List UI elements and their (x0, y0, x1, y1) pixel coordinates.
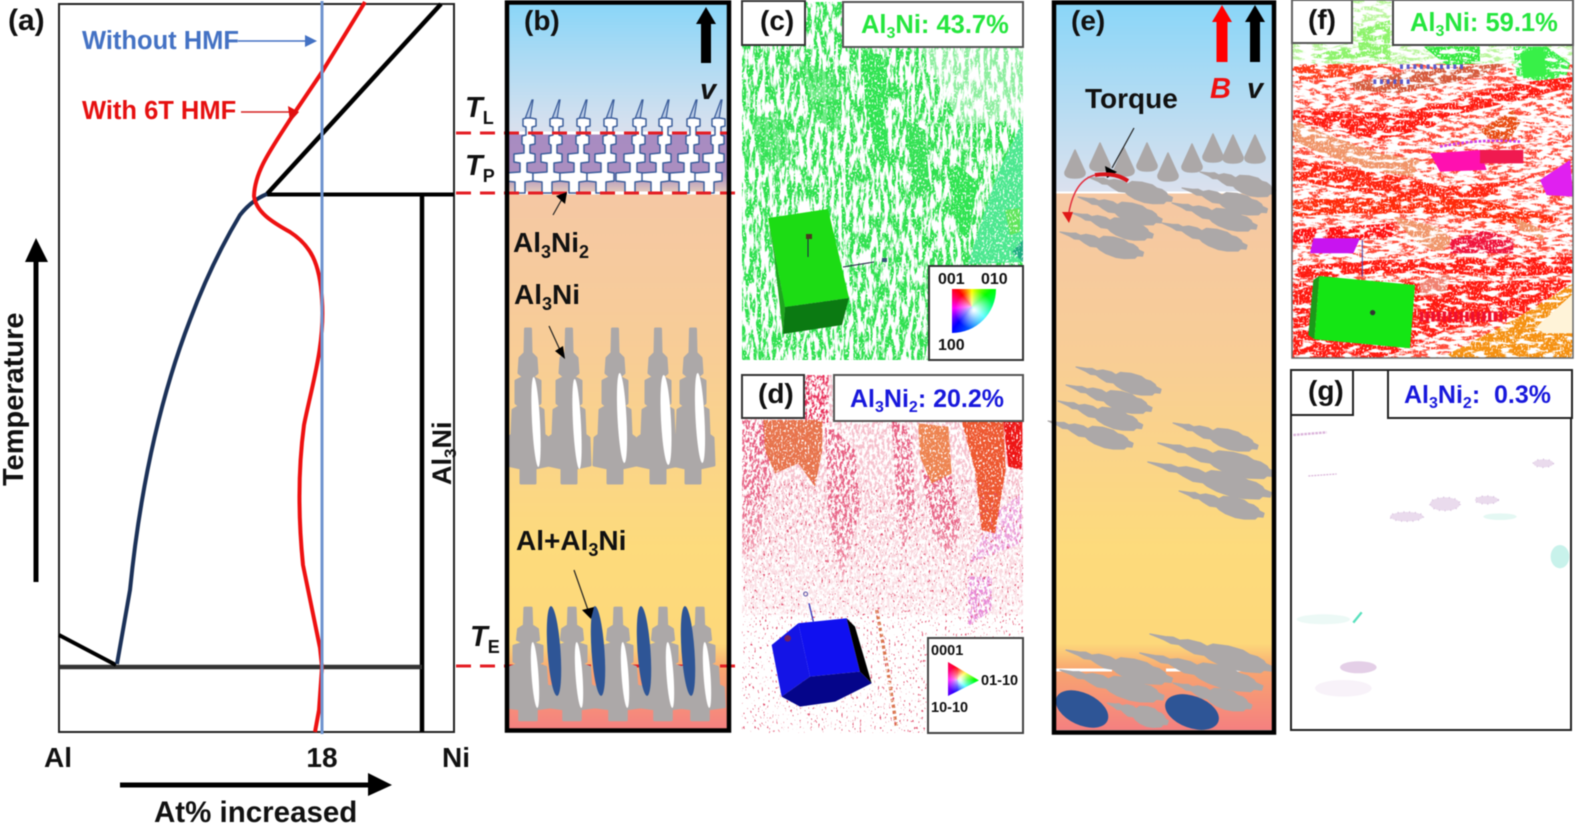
eutectic interface dashes (1056, 668, 1242, 672)
panel (b): solidification schematic without field (456, 2, 742, 730)
temperature axis arrow (25, 238, 48, 582)
IPF legend c: 100 (938, 337, 965, 354)
phase fraction Al3Ni2 20.2% (834, 375, 1023, 421)
IPF legend d: 0001 (931, 643, 963, 659)
IPF legend c (929, 266, 1023, 360)
panel label (b): (b) (524, 5, 560, 36)
green orientation cube c (768, 209, 887, 334)
panel (e): solidification schematic with magnetic field (1045, 2, 1278, 737)
growth velocity arrow (696, 7, 716, 63)
tilted dendrites lower group (1057, 624, 1275, 732)
composition arrow (120, 773, 392, 796)
label box (g) (1291, 370, 1353, 415)
arrow to Al3Ni (549, 326, 565, 359)
label Al+Al3Ni: Ni (598, 525, 626, 556)
peritectic horizontal line (267, 192, 454, 196)
phase fraction Al3Ni2 20.2%: 3 (875, 399, 884, 416)
label B: B (1210, 73, 1231, 105)
IPF legend c: 010 (981, 271, 1008, 288)
label Al3Ni: Al (514, 279, 542, 310)
arrow to red curve (241, 106, 299, 122)
panel (c): Al3Ni orientation map (742, 1, 1023, 360)
blue vertical line 18 at% without HMF (320, 1, 324, 734)
upright cones row (1065, 134, 1265, 181)
blue Al3Ni2 remnants (1050, 683, 1224, 737)
temperature label TE: T (470, 621, 488, 653)
IPF legend d: 01-10 (981, 673, 1018, 689)
temperature label TP: P (483, 166, 495, 186)
liquidus line Al3Ni2 (267, 4, 441, 194)
label box (c) (742, 1, 805, 45)
temperature label TL: L (483, 108, 494, 128)
phase fraction Al3Ni2 0.3% (1388, 370, 1572, 418)
phase fraction Al3Ni 59.1%: 3 (1436, 23, 1444, 40)
phase diagram frame (59, 4, 454, 732)
arrow to Al3Ni2 (553, 192, 567, 215)
panel frame b (507, 2, 729, 730)
tilted dendrites middle group (1045, 358, 1278, 525)
label Al3Ni2: Al (513, 227, 541, 258)
phase fraction Al3Ni 43.7%: Ni: 43.7% (895, 11, 1009, 39)
phase fraction Al3Ni 43.7% (843, 2, 1023, 47)
phase fraction Al3Ni 59.1%: Ni: 59.1% (1444, 9, 1558, 37)
TL TP TE dashed temperature lines (456, 133, 742, 666)
tilted dendrites upper group (1057, 163, 1278, 264)
Al3Ni liquidus curve (117, 194, 267, 664)
phase fraction Al3Ni2 20.2%: Ni (884, 385, 909, 413)
sky gradient liquid zone e (1054, 4, 1274, 192)
label with 6T HMF: With 6T HMF (82, 97, 236, 125)
Al3Ni vertical phase line (420, 194, 424, 732)
temperature label TP: T (465, 150, 483, 182)
panel (a): phase diagram (0, 1, 500, 826)
Al3Ni rotated label: 3 (441, 449, 460, 458)
phase fraction Al3Ni2 20.2%: : 20.2% (918, 385, 1004, 413)
velocity label v: v (700, 74, 718, 106)
phase fraction Al3Ni 59.1% (1393, 0, 1573, 45)
sparse orientation speckles (1293, 432, 1569, 697)
label box (g): (g) (1308, 375, 1344, 406)
IPF legend d (928, 638, 1023, 733)
label box (d) (742, 375, 804, 418)
Al-side solidus line (59, 635, 116, 665)
panel (g): Al3Ni2 orientation map with field (1291, 370, 1572, 730)
Al3Ni dendrite row (507, 329, 714, 483)
phase fraction Al3Ni2 0.3%: Ni (1438, 381, 1463, 409)
phase fraction Al3Ni2 0.3%: : 0.3% (1472, 381, 1551, 409)
phase fraction Al3Ni2 20.2%: 2 (909, 399, 918, 416)
label Al3Ni2: 2 (579, 242, 589, 262)
EBSD map c (742, 2, 1023, 360)
temperature label TL: T (465, 92, 483, 124)
purple peritectic band (507, 133, 729, 193)
phase fraction Al3Ni 59.1%: Al (1410, 9, 1436, 37)
melt gradient zone e (1054, 192, 1274, 730)
IPF legend c: 001 (938, 271, 965, 288)
label Al3Ni: Ni (552, 279, 580, 310)
label box (f): (f) (1308, 4, 1336, 35)
melt gradient zone (507, 193, 729, 730)
panel frame e (1054, 2, 1274, 732)
axis label Ni: Ni (442, 742, 470, 773)
panel label (a): (a) (8, 4, 45, 37)
phase fraction Al3Ni2 0.3%: Al (1404, 381, 1429, 409)
EBSD map f (1292, 0, 1573, 358)
panel label (e): (e) (1071, 5, 1105, 36)
red torque curved arrow (1062, 174, 1128, 223)
red liquidus curve with 6T HMF (254, 2, 365, 732)
label Al+Al3Ni: Al+Al (516, 525, 588, 556)
Al3Ni2 crystal row (506, 100, 725, 193)
arrow to torque (1105, 128, 1134, 178)
green orientation cube f (1308, 240, 1415, 348)
label without HMF: Without HMF (82, 27, 239, 55)
phase fraction Al3Ni 43.7%: 3 (886, 25, 896, 42)
label Torque: Torque (1085, 83, 1178, 114)
label Al3Ni: 3 (542, 294, 552, 314)
temperature label TE: E (488, 637, 500, 657)
label Al3Ni2: Ni (551, 227, 579, 258)
arrow to blue line (238, 35, 317, 47)
white boundary lines (509, 133, 727, 193)
eutectic dendrite row with blue lamellae (504, 606, 724, 720)
blue hexagonal orientation prism (772, 592, 872, 707)
label Al3Ni2: 3 (541, 242, 551, 262)
label v: v (1247, 73, 1265, 105)
phase fraction Al3Ni2 20.2%: Al (850, 385, 875, 413)
axis label Al: Al (44, 742, 72, 773)
panel (d): Al3Ni2 orientation map (742, 370, 1023, 733)
label box (d): (d) (758, 378, 794, 409)
label Al+Al3Ni: 3 (588, 540, 598, 560)
Al3Ni rotated label: Ni (427, 422, 457, 449)
velocity arrow (1245, 5, 1265, 62)
magnetic field arrow B (1212, 5, 1232, 62)
phase fraction Al3Ni2 0.3%: 2 (1463, 395, 1472, 412)
phase fraction Al3Ni2 0.3%: 3 (1429, 395, 1438, 412)
arrow to eutectic (574, 570, 594, 619)
liquid interface line (1056, 192, 1272, 194)
EBSD map g (1291, 370, 1571, 730)
EBSD map d (742, 370, 1023, 733)
panel (f): Al3Ni orientation map with field (1292, 0, 1573, 358)
eutectic horizontal line (59, 665, 422, 669)
sky gradient liquid zone (507, 4, 729, 133)
map frame f (1292, 0, 1573, 358)
Al3Ni rotated label: Al (427, 458, 457, 485)
axis label 18: 18 (306, 742, 338, 773)
phase fraction Al3Ni 43.7%: Al (861, 11, 886, 39)
label box (c): (c) (760, 5, 794, 36)
label box (f) (1292, 0, 1352, 43)
IPF legend d: 10-10 (931, 700, 968, 716)
